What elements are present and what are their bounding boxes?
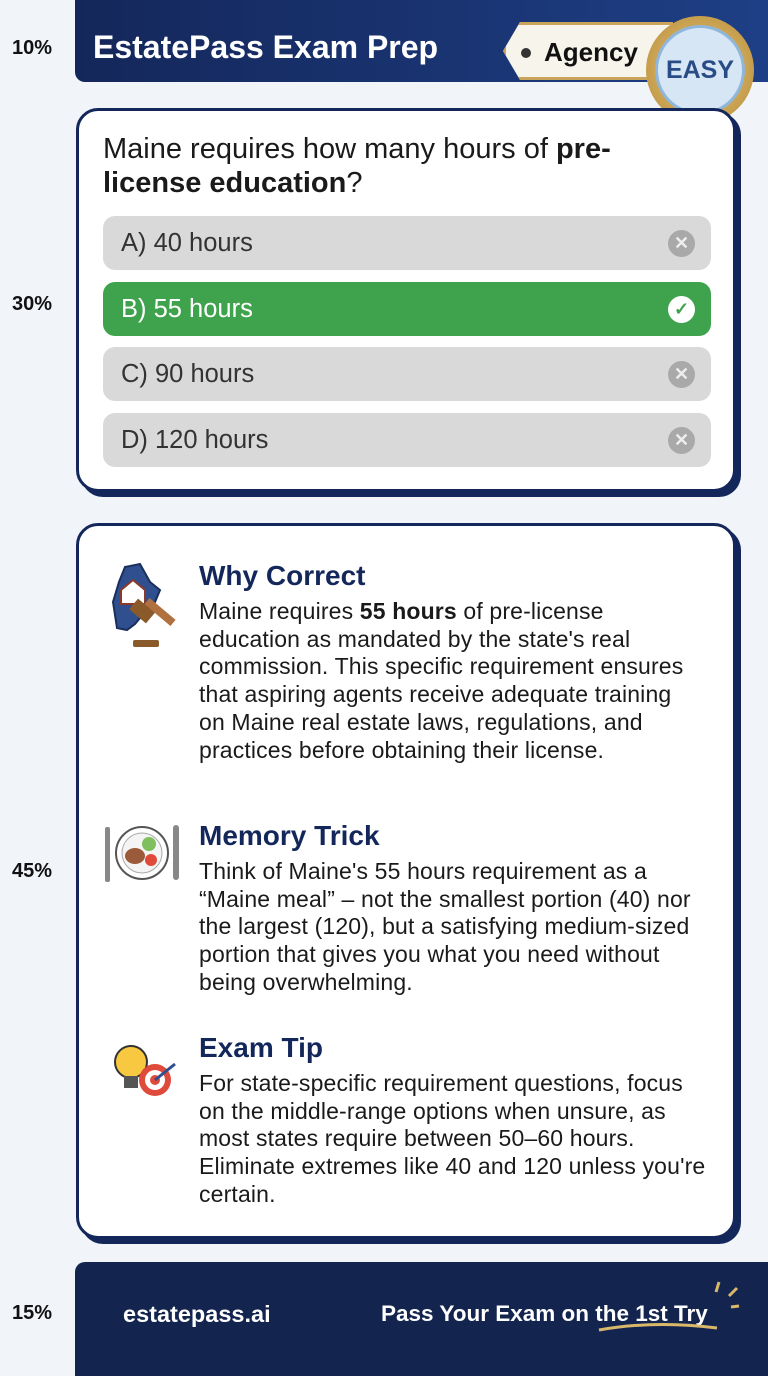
header title: EstatePass Exam Prep: [93, 29, 438, 65]
section: why correct: that aspiring agents receive adequate training: [199, 681, 671, 707]
easy badge: [646, 16, 754, 124]
section: why correct: [199, 560, 683, 763]
footer: [75, 1262, 768, 1376]
option B correct: ✓: [674, 299, 689, 319]
option C: C) 90 hours: [121, 360, 254, 388]
icon: plate meal: [105, 825, 179, 882]
section: memory trick: the largest (120), but a satisfying medium-sized: [199, 913, 689, 939]
agency tag: [503, 22, 673, 80]
section: exam tip: [199, 1032, 705, 1207]
explanation card: [76, 523, 736, 1239]
section: exam tip: Eliminate extremes like 40 and 120 unless you're: [199, 1153, 705, 1179]
question text: license education?: [103, 167, 362, 199]
section: memory trick: “Maine meal” – not the smallest portion (40) nor: [199, 886, 691, 912]
section: why correct: Why Correct: [199, 560, 365, 591]
percent label 45%: 45%: [12, 860, 52, 882]
section: why correct: education as mandated by the state's real: [199, 626, 630, 652]
option D: D) 120 hours: [121, 426, 268, 454]
option C: ✕: [674, 364, 689, 384]
section: memory trick: Think of Maine's 55 hours requirement as a: [199, 858, 647, 884]
option B correct: [103, 282, 711, 336]
section: memory trick: portion that gives you what you need without: [199, 941, 660, 967]
icon: bulb and target: [114, 1045, 176, 1096]
question text: Maine requires how many hours of pre-: [103, 133, 611, 165]
section: exam tip: most states require between 50–60 hours.: [199, 1125, 635, 1151]
option A: A) 40 hours: [121, 229, 253, 257]
footer site name: estatepass.ai: [123, 1301, 271, 1327]
section: exam tip: on the middle-range options when unsure, as: [199, 1098, 666, 1124]
section: why correct: Maine requires 55 hours of pre-license: [199, 598, 604, 624]
section: memory trick: being overwhelming.: [199, 969, 413, 995]
section: memory trick: Memory Trick: [199, 820, 380, 851]
agency tag: Agency: [544, 37, 638, 67]
section: memory trick: [199, 820, 691, 995]
option B correct: B) 55 hours: [121, 295, 253, 323]
section: why correct: practices before obtaining their license.: [199, 737, 604, 763]
option D: [103, 413, 711, 467]
option A: [103, 216, 711, 270]
easy badge: EASY: [666, 56, 734, 84]
percent label 10%: 10%: [12, 37, 52, 59]
section: why correct: commission. This specific requirement ensures: [199, 653, 683, 679]
section: exam tip: certain.: [199, 1181, 276, 1207]
option D: ✕: [674, 430, 689, 450]
icon: maine map with gavel: [112, 562, 176, 647]
footer tagline: Pass Your Exam on the 1st Try: [381, 1301, 708, 1326]
section: exam tip: Exam Tip: [199, 1032, 323, 1063]
header bar: [75, 0, 768, 82]
section: exam tip: For state-specific requirement questions, focus: [199, 1070, 683, 1096]
option A: ✕: [674, 233, 689, 253]
percent label 15%: 15%: [12, 1302, 52, 1324]
section: why correct: on Maine real estate laws, regulations, and: [199, 709, 643, 735]
percent label 30%: 30%: [12, 293, 52, 315]
option C: [103, 347, 711, 401]
question text: [103, 133, 611, 199]
tagline underline: [598, 1282, 740, 1332]
question card: [76, 108, 736, 492]
